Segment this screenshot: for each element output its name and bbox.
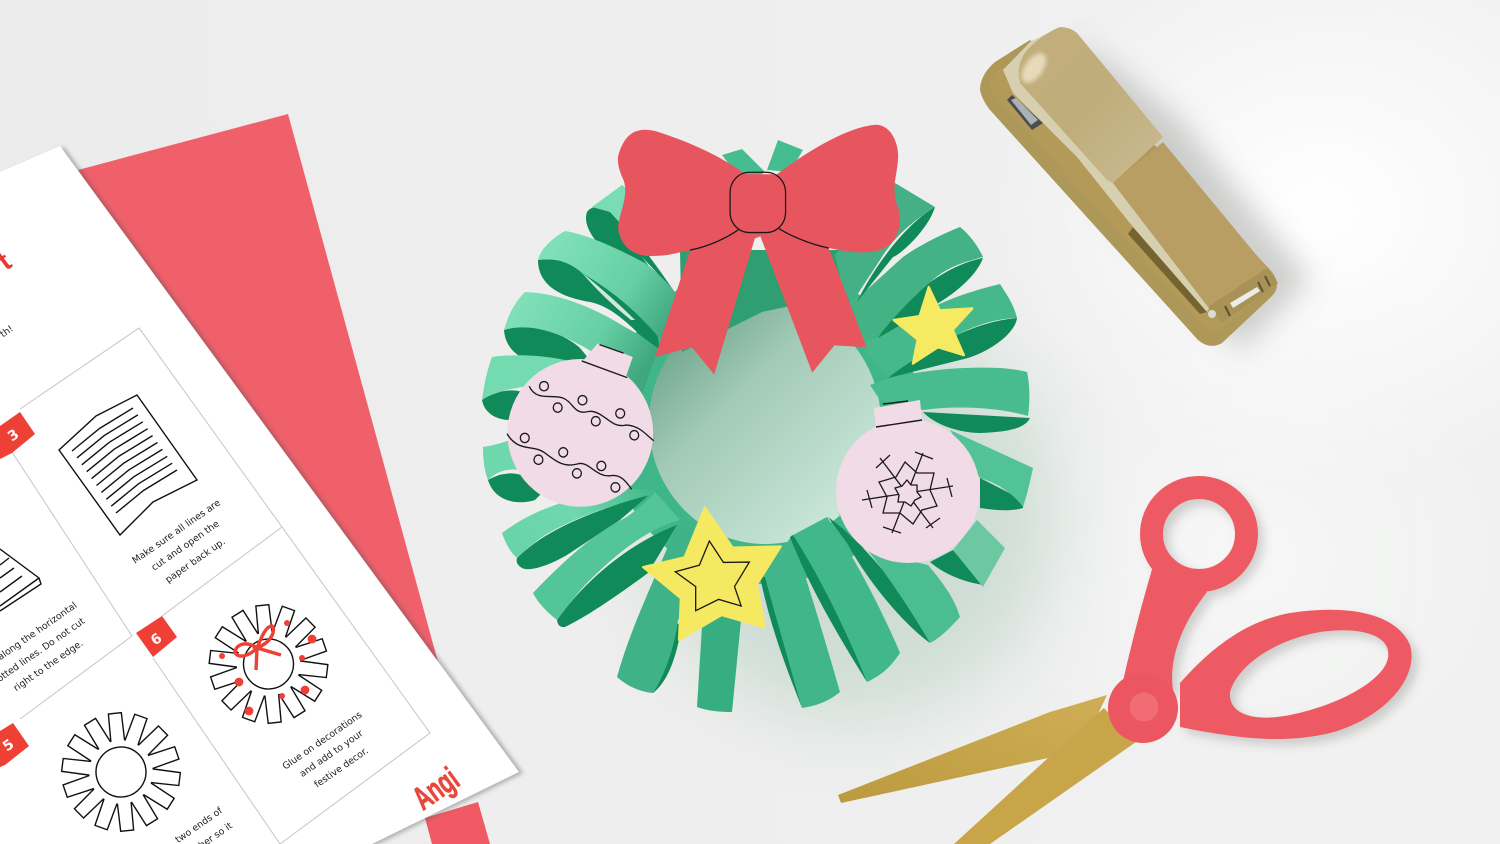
step 6 icon: decorated wreath [204, 599, 333, 729]
scissors shadow [1127, 494, 1418, 745]
logo: Angi: Angi [405, 760, 466, 817]
lower left loops [502, 489, 742, 712]
step 6 caption: and add to your [298, 728, 366, 780]
step 5 badge: 5 [0, 737, 17, 755]
scissors [838, 488, 1418, 844]
step 3 caption: paper back up. [163, 536, 228, 586]
top strips [722, 140, 803, 185]
handle lower loop [1180, 610, 1412, 739]
bow [618, 125, 900, 375]
step 3 badge: 3 [5, 427, 22, 445]
step 3 icon: cut paper [59, 395, 197, 535]
instruction sheet [0, 146, 523, 844]
panel grid lines [12, 328, 430, 844]
lower blade [954, 708, 1136, 844]
handle top ring [1121, 488, 1246, 690]
small yellow star [894, 287, 972, 364]
stapler side [1003, 27, 1210, 312]
wreath hole [647, 299, 883, 547]
step 6 caption: festive decor. [312, 746, 371, 790]
lower right loops [760, 512, 1005, 708]
bow and stars [507, 125, 972, 640]
upper blade [838, 695, 1107, 803]
left loops [482, 185, 680, 502]
stapler head [1019, 27, 1163, 183]
step 2 icon: folded paper [0, 549, 41, 611]
large yellow star [643, 508, 781, 640]
step 5 icon: fanned wreath [56, 707, 186, 837]
base ring [629, 282, 901, 564]
step 2 caption: right to the edge. [12, 638, 86, 694]
step 3 caption: cut and open the [149, 519, 222, 573]
stapler base plate [980, 40, 1277, 346]
step 5 badge [0, 723, 29, 767]
step 6 badge [136, 616, 177, 657]
wreath shadow [645, 310, 1055, 720]
staple tray [1007, 95, 1043, 130]
ornament: snowflake [836, 400, 980, 563]
ornament: wavy pattern [507, 343, 654, 507]
step 6 badge: 6 [148, 631, 165, 649]
stapler [980, 27, 1310, 350]
paper wreath [482, 140, 1033, 712]
stapler back [1113, 142, 1267, 307]
stapler shadow slit [1128, 227, 1207, 314]
red construction paper [78, 114, 490, 844]
step 3 caption: Make sure all lines are [130, 497, 223, 566]
hinge [1208, 268, 1278, 323]
pivot [1108, 673, 1178, 743]
step 3 badge [0, 412, 35, 459]
right loops [835, 183, 1033, 510]
step 6 caption: Glue on decorations [281, 710, 365, 772]
